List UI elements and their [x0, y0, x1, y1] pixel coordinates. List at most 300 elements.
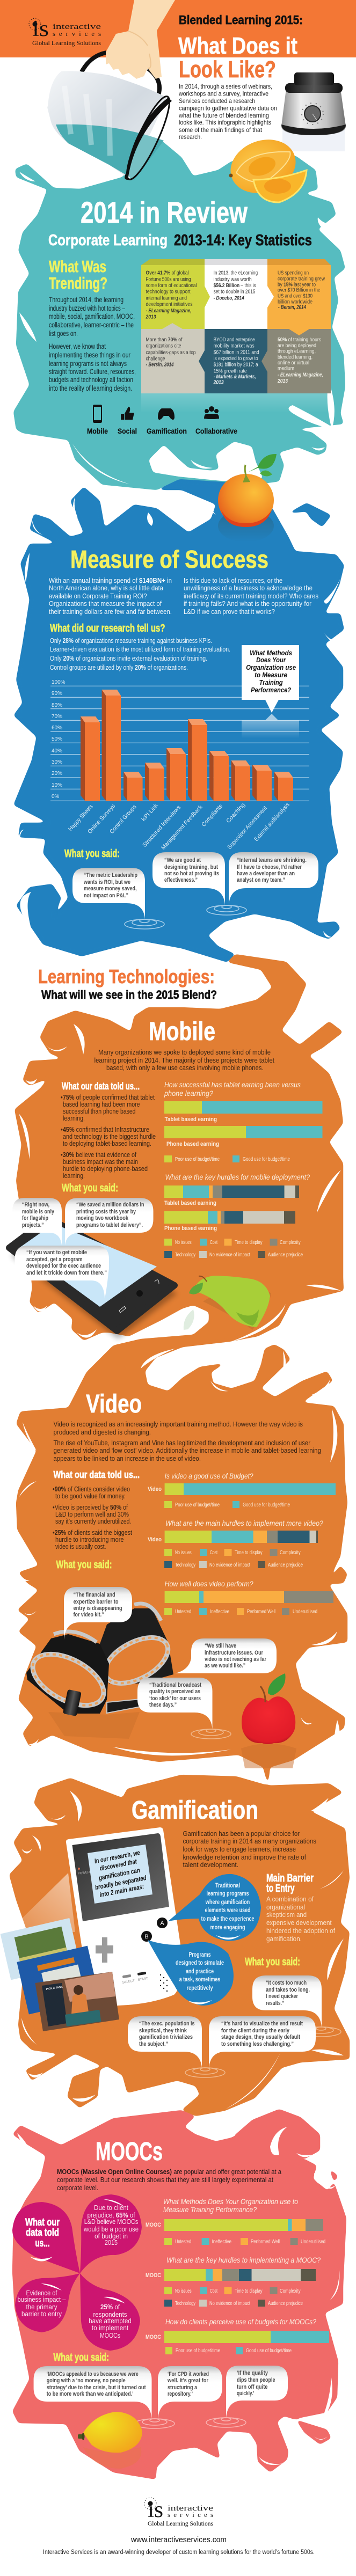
callout: what methods: Training [259, 679, 283, 686]
text: video bullets: L&D to perform well and 30% [55, 1511, 129, 1518]
quote: hard to visualize: “It’s hard to visualize the end result [221, 2021, 303, 2027]
icon: blender base [281, 72, 346, 151]
quote: costs too much: I need quicker [266, 1993, 299, 2000]
text: trending copy: list goes on. [49, 330, 78, 338]
heading: what you said (video): What you said: [56, 1559, 112, 1571]
chart: video hurdles: What are the main hurdles to implement more video? [165, 1519, 323, 1527]
chart: mobile deployment hurdles: Technology [175, 1252, 195, 1258]
stat: training hours: through eLearning, [278, 349, 316, 355]
quote: flagship projects: mobile is only [22, 1209, 55, 1215]
text: research findings: Learner-driven evaluation is the most utilized form of training evaluation. [50, 645, 230, 653]
logo: interactive services header: Global Learning Solutions [32, 39, 101, 47]
drop: programs simulate: repetitively [187, 1984, 213, 1992]
stat: byod: - Markets & Markets, [214, 374, 256, 380]
bar chart: training methods: Compliants [200, 803, 224, 828]
bar chart: training methods: Happy Sheets [67, 803, 95, 832]
chart: video performance: Performed Well [247, 1609, 275, 1615]
quote: good at designing: designing training, but [164, 864, 218, 870]
text: trending copy: collaborative, learner-centric – the [49, 321, 134, 329]
quote: flagship projects: “Right now, [22, 1202, 49, 1208]
text: video bullets: •Video is perceived by 50% of [53, 1504, 128, 1511]
intro text: campaign to gather qualitative data on [179, 104, 277, 112]
footer tagline: Interactive Services is an award-winning developer of custom learning solutions for the world’s fortune 500s. [43, 2549, 315, 2556]
stat: fortune 500s: - ELearning Magazine, [146, 308, 191, 314]
chart: video performance: Ineffective [210, 1609, 229, 1615]
quote: no money no people [34, 2366, 151, 2419]
quote: saved a million: moving two workbook [76, 1215, 129, 1221]
chart: video budget use: Poor use of budget/time [175, 1502, 220, 1508]
chart: video performance: Underutilised [293, 1609, 317, 1615]
stat: byod: mobility market was [214, 343, 255, 349]
chart: mooc budgets: Poor use of budget/time [176, 2348, 220, 2354]
chart: mooc methods: Measure Training Performance? [163, 2205, 257, 2214]
quote: infrastructure issues: video is not reaching as far [205, 1656, 267, 1663]
quote: internal teams: have a developer than an [237, 870, 295, 877]
heading: learning technologies: Learning Technologies: [38, 965, 215, 987]
chart: mooc hurdles: Complexity [280, 2288, 301, 2294]
drop: traditional learning programs: to make the experience [201, 1915, 255, 1922]
chart: video performance: How well does video perform? [165, 1579, 253, 1588]
text: gamification intro: corporate training in 2014 as many organizations [183, 1837, 316, 1845]
image: store screenshot [17, 1946, 99, 2014]
heading: what you said (mobile): What you said: [62, 1182, 118, 1194]
quote: exec audience [15, 1246, 109, 1299]
text: trending copy: budgets and technology all faction [49, 376, 133, 384]
footer url: www.interactiveservices.com [130, 2535, 227, 2544]
text: mobile bullets: based learning had been more [63, 1101, 140, 1108]
text: video bullets: hurdle to introducing more [55, 1536, 124, 1543]
text: moocs intro [57, 2168, 282, 2192]
chart: mooc hurdles: Technology [175, 2301, 195, 2307]
text: measure intro left: North American alone, why is sol little data [49, 584, 164, 592]
heading: what was trending [49, 257, 107, 292]
quote: exec population: “The exec. population is [139, 2021, 194, 2027]
logo: interactive services footer [144, 2498, 213, 2527]
text: mobile intro [95, 1048, 274, 1072]
logo: interactive services header: services [53, 30, 101, 38]
text: video intro: produced and digested is changing. [54, 1428, 151, 1436]
quote: exec population: skeptical, they think [139, 2028, 187, 2034]
quote: costs too much [252, 1975, 341, 2037]
petal: client prejudice: of budget in [95, 2232, 128, 2240]
text: video intro: Video is recognized as an increasingly important training method. However the way video is [54, 1420, 303, 1428]
heading: gamification: Gamification [132, 1796, 258, 1825]
chart: video hurdles: Technology [175, 1562, 195, 1568]
icon: smartphone [9, 1218, 177, 1339]
text: gamification intro: knowledge retention and improve the rate of [183, 1853, 306, 1861]
chart: mooc hurdles: What are the key hurdles to implententing a MOOC? [166, 2256, 321, 2264]
chart: mooc hurdles: No evidence of impact [209, 2301, 250, 2307]
text: mobile bullets: business impact was the main [63, 1158, 138, 1166]
stat: us spending: corporate training grew [278, 276, 325, 282]
chart: mobile deployment hurdles: Tablet based earning [164, 1200, 216, 1206]
chart: video hurdles: Audience prejudice [268, 1562, 303, 1568]
drop: traditional learning programs: elements were used [205, 1906, 250, 1914]
text: video intro [54, 1420, 321, 1462]
text: trending copy: learning programs is not always [49, 360, 127, 368]
heading: mobile data told us: What our data told us... [62, 1081, 140, 1092]
stat: capabilities gaps: More than 70% of [146, 337, 183, 343]
panel: key statistics grid [141, 259, 331, 413]
icon: game console: gamification can [98, 1867, 141, 1882]
quote: metric leadership: “The metric Leadership [84, 872, 137, 879]
drop: traditional learning programs: where gamification [205, 1898, 250, 1906]
jug pouring water [47, 71, 176, 184]
intro text: looks like. This infographic highlights [179, 119, 271, 126]
text: research findings: Only 28% of organizations measure training against business KPIs. [50, 636, 212, 645]
text: moocs intro: corporate level. But our research shows that they are still largely experimental at [57, 2176, 273, 2184]
stat: fortune 500s: 2013 [146, 314, 156, 320]
heading: what was trending: What Was [49, 257, 106, 276]
heading: learning technologies: What will we see in the 2015 Blend? [41, 988, 217, 1001]
icon: game console: In our research, we [94, 1849, 141, 1865]
bar chart: training methods: Control Groups [108, 803, 138, 835]
stat: byod: 2013 [213, 380, 224, 386]
chart: mobile deployment hurdles: Time to display [235, 1240, 263, 1246]
text: measure intro right [184, 576, 318, 616]
stat: training hours: medium [278, 366, 294, 372]
heading: learning technologies [38, 965, 217, 1001]
stat: byod: $67 billion in 2011 and [214, 349, 259, 355]
text: gamification intro: look for ways to engage learners, increase [183, 1845, 296, 1853]
icon: game console: A [160, 1920, 164, 1927]
text: video bullets [53, 1485, 132, 1550]
heading: video data told us: What our data told us... [54, 1469, 140, 1480]
text: measure intro left [49, 576, 172, 616]
petal: what our data told us: What our [25, 2217, 60, 2228]
icon: game console: discovered that [99, 1857, 138, 1872]
chart: mooc hurdles [146, 2256, 321, 2307]
text: measure intro left: With an annual training spend of $140BN+ in [49, 576, 172, 584]
petal: business impact [15, 2273, 80, 2332]
bar chart: training methods: 30% [52, 759, 62, 765]
quote: good at designing: not so hot at proving its [164, 870, 219, 877]
drop: traditional learning programs: Traditional [215, 1882, 240, 1889]
petal: client prejudice: would be a poor use [83, 2225, 139, 2233]
quote: exec population [128, 2016, 225, 2077]
heading: main barrier: Main Barrier [266, 1872, 314, 1884]
text: main barrier copy: gamification. [266, 1935, 302, 1943]
text: mobile bullets: successful than phone based [63, 1108, 136, 1115]
logo: interactive services footer: Global Learning Solutions [148, 2520, 213, 2527]
text: main barrier copy: A combination of [266, 1895, 314, 1903]
petal: attempted moocs: have attempted [89, 2317, 132, 2325]
heading: what was trending: Trending? [49, 274, 107, 292]
text: research findings [50, 636, 230, 671]
icon: mobile [93, 405, 102, 423]
quote: exec audience: “If you want to get mobile [26, 1249, 87, 1256]
logo: interactive services header: is [32, 17, 49, 41]
petal: client prejudice: prejudice, 65% of [87, 2211, 135, 2219]
chart: mooc budgets [146, 2317, 329, 2354]
quote: quality dips: turn off quite [237, 2384, 267, 2390]
text: trending copy [49, 296, 136, 392]
intro text: what the future of blended learning [178, 112, 269, 119]
quote: saved a million [65, 1198, 154, 1245]
text: video bullets: •25% of clients said the biggest [53, 1529, 132, 1536]
text: mobile bullets: to deploying tablet-based learning. [63, 1140, 151, 1147]
chart: mobile deployment hurdles: What are the key hurdles for mobile deployment? [165, 1173, 310, 1181]
quote: hard to visualize: to something less challenging.” [221, 2041, 294, 2047]
bar chart: training methods: 80% [52, 702, 62, 708]
chart: mooc hurdles: Audience prejudice [268, 2301, 303, 2307]
text: mobile intro: based, with only a few use cases involving mobile phones. [106, 1064, 264, 1072]
chart: video hurdles [148, 1519, 323, 1568]
stat: us spending: US and over $130 [278, 293, 313, 299]
drop: programs simulate: and practice [186, 1967, 214, 1975]
stat: training hours: are being deployed [278, 343, 316, 349]
drop: traditional learning programs [168, 1874, 261, 1941]
bar chart: training methods: 90% [52, 691, 62, 697]
quote: no money no people: to be more work than we anticipated.’ [47, 2391, 134, 2397]
stat: byod: $181 billion by 2017; a [214, 362, 258, 368]
text: measure intro right: Is this due to lack of resources, or the [184, 576, 282, 584]
petal: client prejudice [80, 2194, 142, 2273]
petal: attempted moocs: 25% of [100, 2303, 120, 2311]
quote: exec audience: developed for the exec audience [26, 1263, 101, 1269]
bar chart: training methods: 20% [52, 771, 62, 777]
stat: fortune 500s: some form of educational [146, 283, 197, 289]
quote: good at designing: “We are good at [164, 857, 201, 863]
quote: financial barrier: “The financial and [74, 1592, 115, 1598]
quote: traditional broadcast: quality is perceived as [149, 1688, 200, 1695]
stat: elearning industry: industry was worth [214, 276, 252, 282]
quote: traditional broadcast: ‘too slick’ for our users [149, 1695, 201, 1702]
quote: infrastructure issues: “We still have [205, 1643, 236, 1649]
text: main barrier copy: organizational [266, 1903, 305, 1911]
heading: measure of success: Measure of Success [70, 545, 268, 573]
jug handle [82, 53, 159, 97]
stat: capabilities gaps: organizations cite [146, 343, 181, 349]
text: mobile bullets: •30% believe that evidence of [61, 1151, 136, 1159]
heading: 2014 in review: 2014 in Review [81, 195, 248, 229]
icon: film reel [25, 1604, 175, 1739]
pink upper lobe and bay [232, 2109, 320, 2159]
stat: fortune 500s: development initiatives [146, 302, 192, 308]
bar chart: training methods: 0% [52, 794, 60, 800]
text: video bullets: to be good value for money. [55, 1492, 126, 1500]
chart: mooc hurdles: MOOC [146, 2272, 161, 2279]
trending topic labels: Gamification [147, 427, 187, 435]
chart: video budget use [148, 1472, 336, 1508]
stat: elearning industry [214, 270, 258, 302]
bar chart: training methods: 50% [52, 736, 62, 742]
heading: main barrier: to Entry [266, 1883, 295, 1894]
chart: video hurdles: No issues [175, 1550, 192, 1556]
chart: video hurdles: Cost [210, 1550, 217, 1556]
icon: game console: POWER [77, 1871, 90, 1876]
stat: fortune 500s: internal learning and [146, 296, 187, 302]
quote: financial barrier: entry is disappearing [74, 1605, 122, 1612]
icon: thumbs up [121, 407, 134, 420]
blob: teal 2014 in review [13, 138, 345, 490]
stat: us spending: - Bersin, 2014 [278, 305, 306, 311]
chart: video budget use: Good use for budget/time [243, 1502, 290, 1508]
petal: business impact: Evidence of [26, 2289, 57, 2297]
heading: what you said (moocs): What you said: [53, 2352, 109, 2363]
stat: elearning industry: - Docebo, 2014 [214, 296, 244, 302]
chart: video hurdles: Time to display [235, 1550, 263, 1556]
text: mobile bullets [61, 1094, 156, 1180]
icon: gamepad [158, 408, 175, 420]
quote: flagship projects: projects.” [22, 1222, 44, 1228]
stat: training hours: online or virtual [278, 360, 309, 366]
chart: tablet vs phone success: Good use for budget/time [243, 1157, 290, 1162]
quote: internal teams: analyst on my team.” [237, 877, 285, 883]
petal: client prejudice: L&D believe MOOCs [84, 2218, 139, 2226]
intro text: Services conducted a research [179, 97, 255, 105]
text: video bullets: say it’s currently underutilized. [55, 1518, 131, 1525]
heading: key statistics: Corporate Learning [48, 232, 168, 249]
callout: what methods: Does Your [256, 656, 286, 664]
bar chart: training methods: KPI Link [140, 802, 159, 823]
quote: cpd repository: well. It’s great for [167, 2377, 209, 2384]
blob: pink moocs [12, 2110, 346, 2479]
text: trending copy: However, we know that [49, 342, 106, 350]
header band [0, 0, 356, 57]
trending topic labels: Collaborative [195, 427, 237, 435]
petal: what our data told us: us... [35, 2238, 49, 2249]
intro text [178, 83, 277, 141]
text: mobile bullets: •75% of people confirmed that tablet [61, 1094, 155, 1101]
quote: financial barrier [64, 1587, 132, 1640]
quote: exec population: the subject.” [139, 2041, 168, 2047]
text: mobile bullets: learning. [63, 1172, 85, 1180]
petal: what our data told us: data told [26, 2227, 59, 2238]
quote: infrastructure issues: as we would like.” [205, 1663, 245, 1669]
chart: mooc methods: Ineffective [212, 2239, 231, 2245]
quote: exec audience: and let it trickle down from there.” [26, 1270, 107, 1276]
quote: no money no people: strategy’ due to the crisis, but it turned out [47, 2384, 146, 2391]
chart: mooc hurdles: No issues [175, 2288, 192, 2294]
icon: apple [241, 1673, 296, 1768]
text: measure intro left: their training dollars are few and far between. [49, 608, 172, 616]
quote: traditional broadcast [137, 1678, 231, 1739]
petal: attempted moocs: to implement [92, 2324, 129, 2332]
white bays in teal splash [149, 442, 263, 481]
stat: capabilities gaps: - Bersin, 2014 [146, 362, 174, 368]
heading: research: What did our research tell us? [50, 623, 165, 634]
chart: mooc hurdles: Time to display [235, 2288, 263, 2294]
text: main barrier copy: expensive development [266, 1919, 332, 1927]
quote: hard to visualize: for the client during the early [221, 2028, 290, 2034]
icon: game console: into 2 main areas: [99, 1883, 144, 1899]
callout: what methods: to Measure [255, 671, 287, 679]
stat: fortune 500s: technology to support [146, 289, 191, 295]
petal: business impact: the primary [26, 2303, 57, 2311]
petal: business impact: barrier to entry [21, 2310, 62, 2318]
text: mobile bullets: learning. [63, 1115, 85, 1122]
drop: programs simulate: designed to simulate [176, 1959, 224, 1966]
drop: programs simulate: Programs [189, 1951, 211, 1958]
icon: mango [78, 2412, 142, 2469]
bar chart: training methods [50, 679, 309, 851]
stat: elearning industry: $56.2 Billion – this is [214, 283, 256, 289]
icon: collaborative people [204, 406, 219, 419]
petal: what our data told us [12, 2202, 80, 2273]
chart: mobile deployment hurdles: Complexity [280, 1240, 301, 1246]
icon: game console [8, 1827, 183, 2010]
chart: mooc methods: What Methods Does Your Organization use to [163, 2197, 298, 2206]
callout: what methods: Organization use [246, 664, 296, 671]
stat: training hours [277, 337, 323, 384]
quote: financial barrier: for video kit.” [74, 1612, 104, 1618]
quote: cpd repository: structuring a [168, 2384, 198, 2391]
stat: training hours: blended learning, [278, 354, 313, 360]
image: restaurant screenshot: PICK A TASK [46, 1986, 63, 1991]
bar chart: training methods: Supervisor Assessment [226, 805, 268, 851]
text: measure intro left: Organizations that measure the impact of [49, 599, 162, 608]
quote: flagship projects: for flagship [22, 1215, 48, 1221]
quote: internal teams: “Internal teams are shrinking. [237, 857, 307, 863]
callout: what methods: Performance? [251, 686, 291, 694]
quote: saved a million: programs to tablet delivery”. [76, 1222, 143, 1228]
chart: mooc hurdles: Cost [210, 2288, 217, 2294]
bar chart: training methods: External audit/analysis [253, 801, 291, 843]
icon: game console: START [137, 1977, 149, 1982]
text: gamification intro: talent development. [183, 1861, 238, 1869]
chart: mooc methods: MOOC [146, 2222, 161, 2228]
text: trending copy: Throughout 2014, the learning [49, 296, 123, 304]
text: main barrier copy [266, 1895, 335, 1943]
chart: mooc budgets: How do clients perceive use of budgets for MOOCs? [165, 2317, 316, 2326]
chart: mooc methods: Untested [175, 2239, 191, 2245]
quote: no money no people: going with a ‘no money, no people [47, 2377, 126, 2384]
heading: what you said (measure): What you said: [64, 848, 120, 860]
text: measure intro right: unwillingness of a business to acknowledge the [184, 584, 313, 592]
trending topic labels: Mobile [87, 427, 108, 435]
intro text: research. [179, 133, 202, 141]
text: video intro: The rise of YouTube, Instagram and Vine has legitimized the development and inclusion of user [54, 1439, 311, 1447]
intro text: workshops and a survey, Interactive [178, 90, 268, 98]
stat: fortune 500s: Fortune 500s are using [146, 276, 191, 282]
quote: internal teams: If I have to choose, I’d rather [237, 864, 302, 870]
text: measure intro right: inefficacy of its current training model? Who cares [184, 592, 318, 600]
blob: orange mobile video gamification [9, 954, 350, 2116]
callout: what methods [242, 645, 299, 738]
chart: video performance: Untested [175, 1609, 191, 1615]
bar chart: training methods: Online Surveys [86, 803, 117, 835]
stat: fortune 500s [146, 270, 197, 320]
intro text: In 2014, through a series of webinars, [179, 83, 272, 90]
icon: pear [184, 1276, 271, 1330]
trending topic labels: Social [118, 427, 137, 435]
text: main barrier copy: hindered the adoption of [266, 1927, 335, 1935]
stat: elearning industry: In 2013, the eLearning [214, 270, 258, 276]
bar chart: training methods: 100% [52, 679, 66, 685]
stat: training hours: 2013 [277, 378, 288, 384]
quote: financial barrier: expertize barrier to [74, 1599, 119, 1605]
petal: attempted moocs [80, 2273, 140, 2351]
chart: mobile deployment hurdles: No issues [175, 1240, 192, 1246]
quote: hard to visualize [209, 2016, 316, 2068]
stat: fortune 500s: Over 41.7% of global [146, 270, 189, 276]
text: video bullets: video is usually cost. [55, 1543, 106, 1550]
text: main barrier copy: skepticism and [266, 1911, 307, 1919]
quote: costs too much: “It costs too much [266, 1980, 307, 1986]
quote: quality dips: ‘If the quality [237, 2370, 268, 2376]
bar chart: training methods: Coaching [225, 802, 246, 824]
quote: internal teams [207, 852, 318, 915]
quote: traditional broadcast: these days.” [149, 1702, 177, 1708]
logo: interactive services footer: interactive [168, 2504, 213, 2513]
text: trending copy: into the reality of learning design. [49, 384, 132, 392]
heading: main barrier [266, 1872, 314, 1894]
stat: byod: BYOD and enterprise [214, 337, 255, 343]
image: restaurant screenshot [35, 1972, 119, 2031]
quote: exec population: gamification trivializes [139, 2034, 193, 2040]
icon: game console: broadly be separated [95, 1874, 147, 1891]
